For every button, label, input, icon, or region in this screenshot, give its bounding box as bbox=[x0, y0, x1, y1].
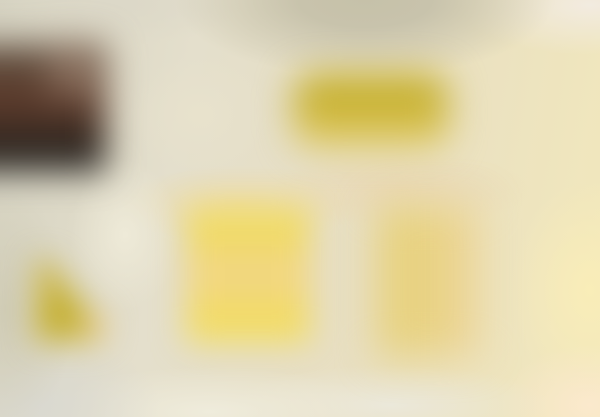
photo highlight bbox=[50, 48, 100, 93]
panel: center yellow square bbox=[186, 208, 310, 342]
photo: dark image block bbox=[0, 44, 106, 172]
panel: top yellow pill bbox=[294, 74, 448, 148]
icon: yellow triangle bbox=[14, 244, 120, 364]
panel: right pale yellow block bbox=[378, 206, 478, 356]
